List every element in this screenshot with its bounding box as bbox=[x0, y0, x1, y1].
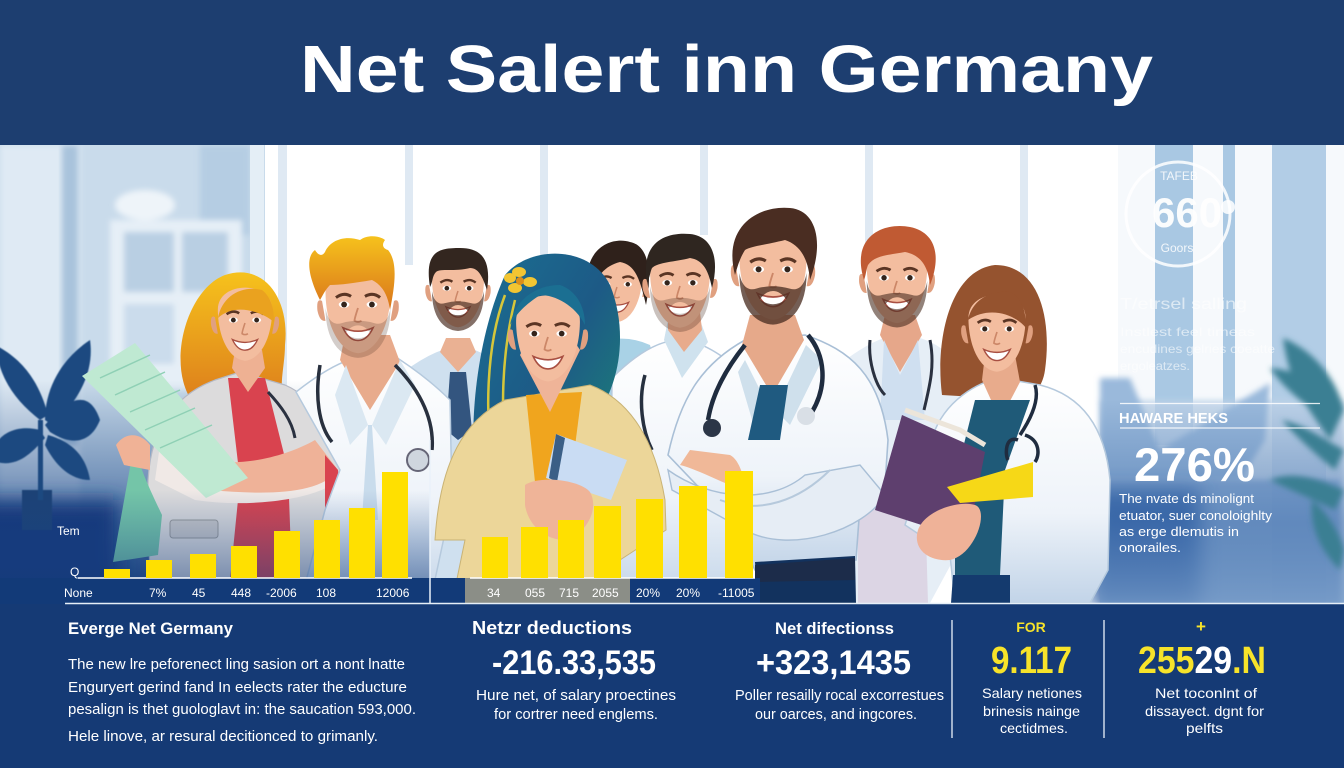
stat block: for: brinesis nainge bbox=[983, 703, 1080, 719]
right column: highlight stat: onorailes. bbox=[1119, 541, 1181, 555]
right column: highlight stat: etuator, suer conoloighlty bbox=[1119, 509, 1273, 523]
person: back woman bbox=[585, 241, 665, 420]
background: office scene bbox=[0, 145, 1344, 610]
stat block: net deductions bbox=[472, 618, 676, 723]
bar chart: right: 055 bbox=[525, 586, 545, 600]
right column: highlight stat: 276% bbox=[1134, 438, 1255, 491]
right column: highlight stat: The nvate ds minolignt bbox=[1119, 492, 1255, 506]
right column: circular stat: TAFEB bbox=[1160, 169, 1198, 183]
stat block: everage net Germany: Hele linove, ar resural decitionced to grimanly. bbox=[68, 728, 378, 745]
bar chart: left: 7% bbox=[149, 586, 167, 600]
stat block: plus: 25529.N bbox=[1138, 640, 1266, 682]
person: woman in white coat bbox=[905, 265, 1110, 603]
stat block: net difections: our oarces, and ingcores. bbox=[755, 706, 917, 723]
right column: circular stat: 660 bbox=[1152, 189, 1222, 236]
right column: faint note: Instlest feel timeas bbox=[1120, 325, 1255, 339]
bar chart: right: 20% bbox=[676, 586, 700, 600]
chart divider bbox=[429, 440, 431, 603]
bar chart: right bbox=[470, 471, 755, 600]
lower scene shading over team bbox=[0, 490, 760, 604]
right column: highlight stat: HAWARE HEKS bbox=[1119, 410, 1228, 427]
bar chart: right: 715 bbox=[559, 586, 579, 600]
bar chart: left bbox=[57, 472, 412, 600]
bar chart: right: 2055 bbox=[592, 586, 619, 600]
stat block: net difections: +323,1435 bbox=[756, 644, 911, 682]
right column: faint note: encudines gelries coeatte bbox=[1120, 342, 1275, 356]
person: back man left bbox=[396, 248, 520, 603]
stat block: for: 9.117 bbox=[991, 640, 1072, 682]
shelf and vase bbox=[110, 190, 242, 390]
divider bbox=[952, 620, 1104, 738]
bottom panel bbox=[0, 604, 1344, 768]
right blurred window bbox=[1118, 145, 1344, 605]
stat block: plus: + bbox=[1196, 617, 1206, 636]
panel rule bbox=[65, 602, 1344, 604]
right column: highlight stat: as erge dlemutis in bbox=[1119, 525, 1239, 539]
stat block: net deductions: for cortrer need englems. bbox=[494, 706, 658, 723]
stat block: plus bbox=[1138, 617, 1266, 736]
stat block: plus: pelfts bbox=[1186, 720, 1223, 736]
stat block: for: Salary netiones bbox=[982, 685, 1082, 701]
bar chart: left: 12006 bbox=[376, 586, 410, 600]
stat block: net deductions: Hure net, of salary proectines bbox=[476, 687, 676, 704]
bar chart: left: None bbox=[64, 586, 93, 600]
bar chart: left: 45 bbox=[192, 586, 206, 600]
flower bbox=[504, 267, 537, 293]
stat block: net difections: Net difectionss bbox=[775, 619, 894, 638]
bar chart: right: 34 bbox=[487, 586, 501, 600]
person: center doctor bbox=[668, 208, 888, 603]
bar chart: left: Q bbox=[70, 565, 79, 579]
stat block: net deductions: Netzr deductions bbox=[472, 618, 632, 638]
person: spiky haired man bbox=[296, 236, 452, 603]
bar chart: right: -11005 bbox=[718, 586, 755, 600]
bar chart: left: -2006 bbox=[266, 586, 297, 600]
right column: faint note: T/etrsel salling bbox=[1120, 296, 1247, 313]
right column: faint note: ergoleatzes. bbox=[1120, 359, 1190, 373]
right column: circular stat bbox=[1126, 162, 1235, 266]
window mullions bbox=[278, 145, 1028, 405]
person: man with red hair bbox=[848, 226, 975, 603]
right column: highlight stat bbox=[1119, 404, 1320, 555]
document: green chart paper bbox=[82, 343, 248, 562]
stat block: net difections: Poller resailly rocal excorrestues bbox=[735, 687, 944, 704]
scene fade behind team bbox=[0, 380, 1344, 630]
stat block: net difections bbox=[735, 619, 944, 723]
stat block: plus: Net toconlnt of bbox=[1155, 685, 1257, 701]
right column: faint note bbox=[1120, 296, 1275, 373]
stat block: plus: dissayect. dgnt for bbox=[1145, 703, 1264, 719]
document: purple book and yellow folder bbox=[875, 410, 1033, 560]
person: woman with blue hair bbox=[435, 254, 666, 603]
person: man behind right of center bbox=[610, 234, 750, 603]
plant: right bbox=[1270, 338, 1344, 570]
bar chart: left: 108 bbox=[316, 586, 336, 600]
plant: left bbox=[0, 340, 100, 530]
stat block: net deductions: -216.33,535 bbox=[492, 644, 656, 682]
stat block: for bbox=[982, 619, 1082, 736]
stat block: everage net Germany: Enguryert gerind fand In eelects rater the educture bbox=[68, 679, 407, 696]
stat block: everage net Germany: Everge Net Germany bbox=[68, 619, 234, 638]
stat block: everage net Germany: pesalign is thet guologlavt in: the saucation 593,000. bbox=[68, 701, 416, 718]
right column: circular stat: Goors bbox=[1161, 241, 1193, 255]
stat block: everage net Germany bbox=[68, 619, 416, 745]
axis line bbox=[78, 577, 412, 579]
bar chart: left: Tem bbox=[57, 524, 80, 538]
stat block: for: cectidmes. bbox=[1000, 720, 1068, 736]
illustration: medical team bbox=[82, 208, 1110, 603]
person: blonde woman bbox=[148, 272, 343, 580]
bar chart: right: 20% bbox=[636, 586, 660, 600]
stat block: everage net Germany: The new lre peforenect ling sasion ort a nont lnatte bbox=[68, 656, 405, 673]
stat block: for: FOR bbox=[1016, 619, 1046, 635]
header band bbox=[0, 0, 1344, 145]
title: Net Salert inn Germany bbox=[300, 32, 1153, 107]
bar chart: left: 448 bbox=[231, 586, 251, 600]
